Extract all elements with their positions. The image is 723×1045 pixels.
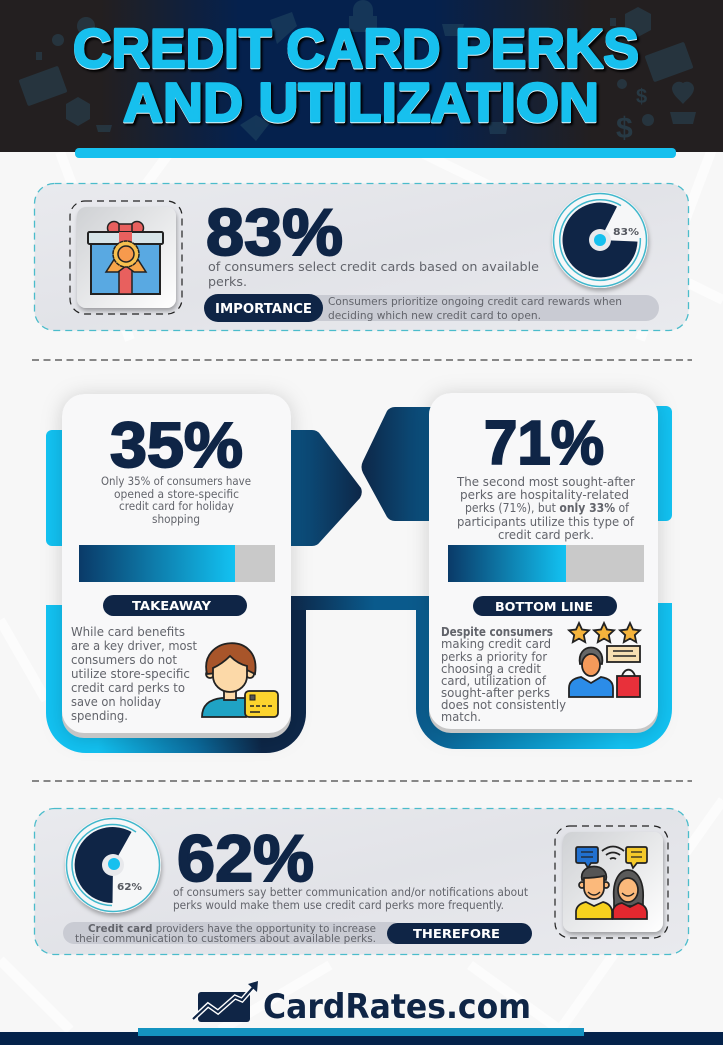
stat description: perks. [208, 274, 247, 289]
stat description: of consumers select credit cards based on available [208, 259, 539, 274]
stat description [173, 885, 528, 912]
logo [193, 981, 531, 1027]
right description: perks (71%), but only 33% of [465, 501, 630, 515]
stat description: of consumers say better communication and/or notifications about [173, 885, 528, 899]
panel: 62% therefore [34, 808, 688, 954]
icon: shopper with ratings [569, 623, 640, 697]
importance note [298, 295, 659, 322]
therefore note: Credit card providers have the opportunity to increase [88, 922, 376, 935]
left description: credit card for holiday [119, 499, 234, 513]
bottom line text: Despite consumers [441, 625, 553, 639]
stat description: perks would make them use credit card perks more frequently. [173, 898, 504, 912]
importance note: deciding which new credit card to open. [328, 309, 541, 322]
takeaway text: spending. [71, 709, 128, 723]
takeaway text: credit card perks to [71, 681, 185, 695]
left cyan tab [46, 430, 76, 546]
icon: people communicating [555, 826, 668, 938]
panel: right 71% card [291, 393, 672, 749]
bottom line text: match. [441, 710, 481, 724]
importance label [204, 294, 323, 322]
takeaway label: TAKEAWAY [132, 598, 212, 613]
left frame [46, 596, 306, 753]
importance note: Consumers prioritize ongoing credit card rewards when [328, 295, 622, 308]
panel: left 35% card [46, 394, 362, 753]
left arrow [280, 430, 362, 546]
importance label: IMPORTANCE [215, 302, 312, 317]
takeaway text: utilize store-specific [71, 667, 190, 681]
bottom line text: choosing a credit [441, 662, 541, 676]
right description: participants utilize this type of [457, 515, 635, 529]
therefore note: their communication to customers about available perks. [75, 932, 376, 945]
chart: 62% pie [65, 817, 161, 913]
icon: gift [70, 201, 182, 314]
bottom line label [473, 596, 617, 616]
progress bar: 35% card [79, 545, 275, 582]
logo wordmark: CardRates.com [263, 987, 531, 1027]
right cyan tab [640, 406, 672, 521]
therefore label: THEREFORE [413, 926, 500, 941]
stat: 35%: 35% [110, 409, 243, 481]
left description [101, 474, 251, 526]
right arrow [362, 407, 440, 521]
title [73, 17, 639, 133]
header banner [0, 0, 723, 158]
right frame [416, 596, 672, 749]
stat: 83%: 83% [206, 195, 343, 269]
footer band [0, 1028, 723, 1045]
icon: person with card [202, 643, 278, 717]
dashed divider top [32, 359, 692, 361]
right white card [429, 393, 658, 733]
icon: logo card with arrow [193, 981, 258, 1022]
dashed divider bottom [32, 780, 692, 782]
right description: The second most sought-after [456, 475, 635, 489]
bottom line text: making credit card [441, 637, 551, 651]
chart: 83% pie: 83% [613, 227, 639, 238]
bottom line text: does not consistently [441, 698, 566, 712]
takeaway text: save on holiday [71, 695, 161, 709]
title: CREDIT CARD PERKS [73, 17, 639, 79]
panel: 83% importance [34, 184, 688, 330]
progress bar: 71% card [448, 545, 644, 582]
stat: 62%: 62% [177, 821, 314, 895]
right description [456, 475, 635, 542]
bottom line label: BOTTOM LINE [495, 599, 593, 614]
bottom line text: perks a priority for [441, 650, 547, 664]
bottom line text [441, 625, 566, 724]
right description: credit card perk. [498, 528, 594, 542]
left description: opened a store-specific [114, 487, 239, 501]
decorative header icons [18, 0, 696, 141]
takeaway text: are a key driver, most [71, 639, 197, 653]
takeaway text: consumers do not [71, 653, 177, 667]
bottom line text: sought-after perks [441, 686, 550, 700]
decorative dollar signs: $ [616, 112, 633, 145]
chart: 62% pie: 62% [117, 882, 142, 893]
takeaway text [71, 625, 197, 723]
header accent bar [75, 148, 676, 158]
connector between cards [291, 596, 430, 610]
therefore note [63, 922, 403, 945]
bottom line text: card, utilization of [441, 674, 547, 688]
stat description [208, 259, 539, 289]
decorative dollar signs: $ [636, 86, 647, 108]
left description: Only 35% of consumers have [101, 474, 251, 488]
stat: 71%: 71% [484, 409, 604, 478]
chart: 83% pie [552, 192, 648, 288]
right description: perks are hospitality-related [460, 488, 629, 502]
therefore label [387, 923, 532, 944]
left description: shopping [152, 512, 200, 526]
left white card [62, 394, 291, 738]
takeaway label [103, 595, 247, 616]
title: AND UTILIZATION [123, 71, 599, 133]
decorative dollar signs [616, 86, 647, 145]
takeaway text: While card benefits [71, 625, 185, 639]
